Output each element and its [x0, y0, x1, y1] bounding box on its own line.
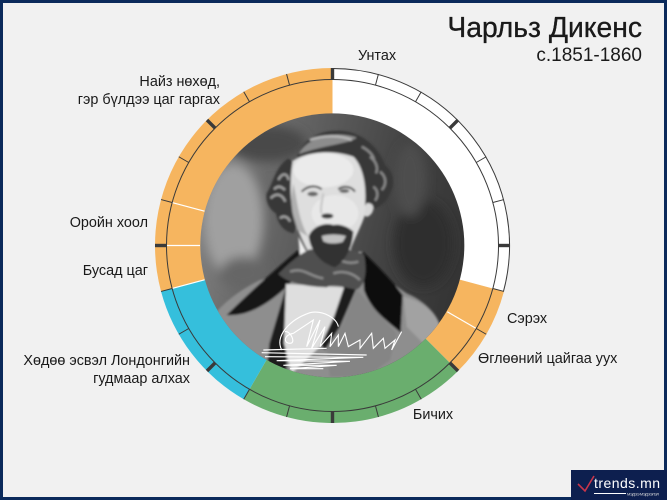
portrait photograph of Charles Dickens	[200, 113, 464, 378]
segment: sleep	[332, 68, 510, 291]
label: friends and family: Найз нөхөд,	[139, 74, 220, 90]
label: writing: Бичих	[413, 407, 454, 423]
sleep segment outer outline	[332, 68, 510, 291]
segment dividers	[166, 203, 476, 328]
label: sleep: Унтах	[358, 48, 397, 64]
label: walking	[23, 353, 191, 387]
logo: trends.mn: trends.mn	[594, 475, 660, 491]
label: friends and family: гэр бүлдээ цаг гаргах	[78, 92, 221, 108]
label: walking: Хөдөө эсвэл Лондонгийн	[23, 353, 190, 369]
label: dinner: Оройн хоол	[70, 215, 148, 231]
label: waking: Сэрэх	[507, 311, 548, 327]
logo: trends.mn: МЭДЭЭ МЭДЭЭЛЭЛ	[627, 492, 659, 496]
label: friends and family	[78, 74, 221, 108]
subtitle: с.1851-1860	[536, 45, 642, 66]
label: free time: Бусад цаг	[83, 263, 148, 279]
segment: writing	[244, 246, 458, 423]
logo: trends.mn	[571, 470, 667, 500]
hour ticks	[161, 74, 504, 417]
label: walking: гудмаар алхах	[93, 371, 191, 387]
segment: walking	[161, 246, 332, 399]
three-hour ticks	[155, 68, 510, 423]
title: Чарльз Дикенс	[447, 11, 642, 43]
segment: friends, family, dinner	[155, 68, 332, 291]
daily routine ring chart	[155, 68, 510, 423]
label: breakfast: Өглөөний цайгаа уух	[478, 351, 618, 367]
inner clock ring outline	[166, 80, 498, 412]
segment: waking and breakfast	[332, 246, 504, 371]
